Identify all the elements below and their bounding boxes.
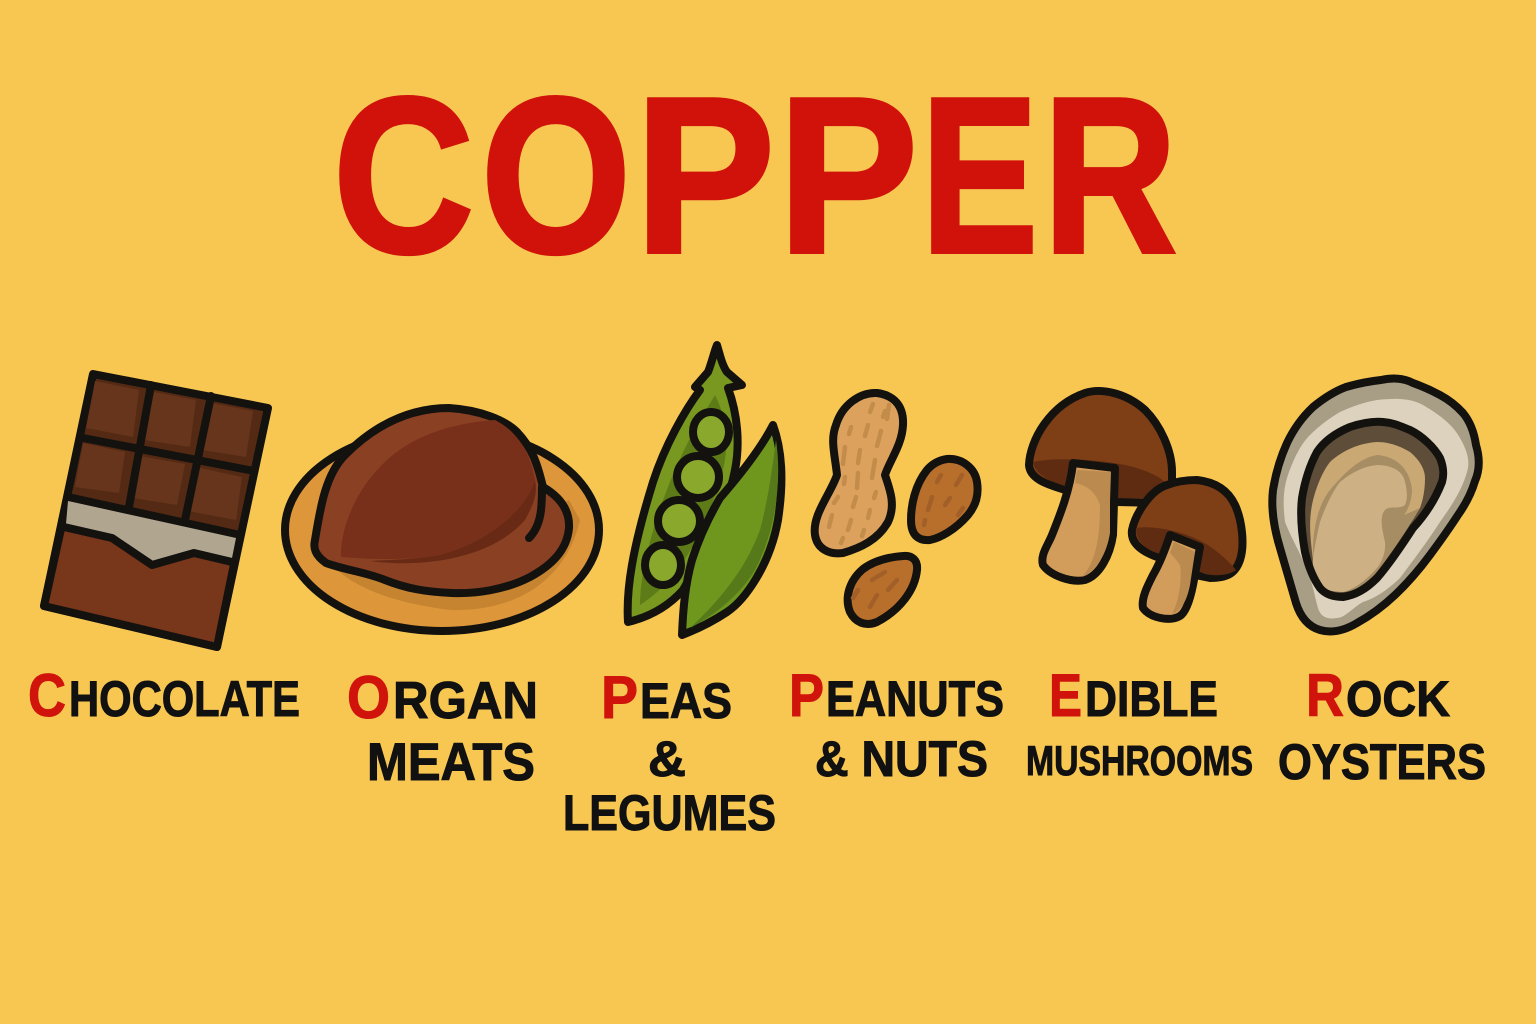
label: peanuts and nuts: P [789,662,824,729]
label: organ meats: RGAN [393,672,538,730]
label: edible mushrooms [1026,662,1253,784]
icon: chocolate bar [44,374,268,647]
label: peas and legumes: EAS [640,673,732,729]
title: P [635,52,775,300]
label: chocolate: C [28,662,66,729]
title: P [778,52,918,300]
title: O [481,52,631,300]
label: organ meats [347,664,538,792]
label: edible mushrooms: DIBLE [1085,671,1218,727]
label: organ meats: O [347,664,390,731]
title: C [333,52,474,300]
title: E [921,52,1038,300]
label: peanuts and nuts [789,662,1004,787]
label: rock oysters [1278,662,1486,790]
label: peanuts and nuts: EANUTS [826,671,1004,727]
icon: mushrooms [1029,391,1242,619]
icon: organ meat on plate [285,408,599,631]
icon: peanuts and nuts [815,393,978,624]
label: peas and legumes: P [601,664,638,731]
label: rock oysters: OYSTERS [1278,734,1486,790]
label: chocolate: HOCOLATE [69,671,300,727]
label: peas and legumes: & [648,731,686,787]
label: rock oysters: OCK [1346,671,1450,727]
label: peas and legumes: LEGUMES [563,785,776,841]
label: organ meats: MEATS [367,733,535,792]
label: peas and legumes [563,664,776,841]
title: R [1043,52,1177,300]
label: peanuts and nuts: & NUTS [815,731,988,787]
label: rock oysters: R [1306,662,1344,729]
icon: rock oyster [1272,379,1479,631]
label: edible mushrooms: E [1049,662,1082,729]
label: edible mushrooms: MUSHROOMS [1026,737,1253,784]
icon: pea pod [628,345,781,635]
label: chocolate [28,662,300,729]
